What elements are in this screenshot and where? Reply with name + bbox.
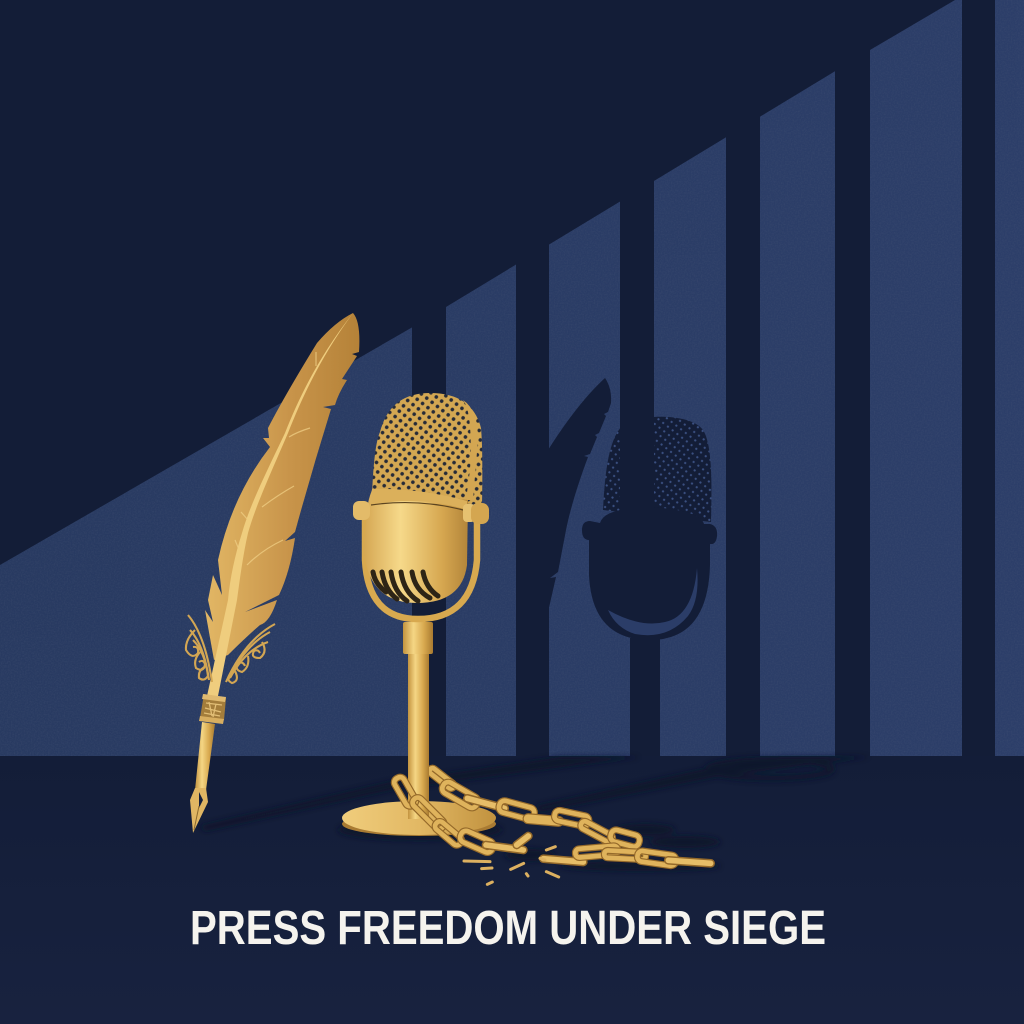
light beam through prison bars xyxy=(0,0,1024,756)
microphone vents xyxy=(373,572,438,601)
lower chain run xyxy=(543,845,711,866)
icon: golden quill feather xyxy=(186,313,359,833)
shadow of microphone xyxy=(582,417,717,756)
microphone base xyxy=(342,801,496,836)
chain around stand xyxy=(393,775,528,854)
floor xyxy=(0,756,1024,1024)
broken chain fragments xyxy=(464,847,559,884)
suspension ring xyxy=(365,515,477,619)
microphone stem xyxy=(408,654,429,819)
stem collar xyxy=(403,622,433,654)
shadow of feather xyxy=(530,378,611,612)
upper chain run xyxy=(440,780,641,848)
microphone head grille xyxy=(372,393,482,505)
chain link behind stand xyxy=(428,767,455,790)
floor shadows xyxy=(200,757,870,871)
microphone side knobs xyxy=(353,501,489,524)
prison bar shadows xyxy=(412,0,995,756)
feather shaft xyxy=(207,313,353,696)
microphone body xyxy=(364,490,468,603)
title: PRESS FREEDOM UNDER SIEGE xyxy=(190,902,826,955)
feather vane xyxy=(205,313,359,660)
icon: broken chain xyxy=(393,775,711,884)
wall background xyxy=(0,0,1024,760)
pen nib xyxy=(190,722,215,833)
body collar band xyxy=(371,489,467,510)
icon: golden microphone xyxy=(342,393,496,836)
feather barb highlights xyxy=(235,352,316,565)
pen ferrule xyxy=(199,694,226,724)
filigree scrollwork xyxy=(186,615,275,683)
